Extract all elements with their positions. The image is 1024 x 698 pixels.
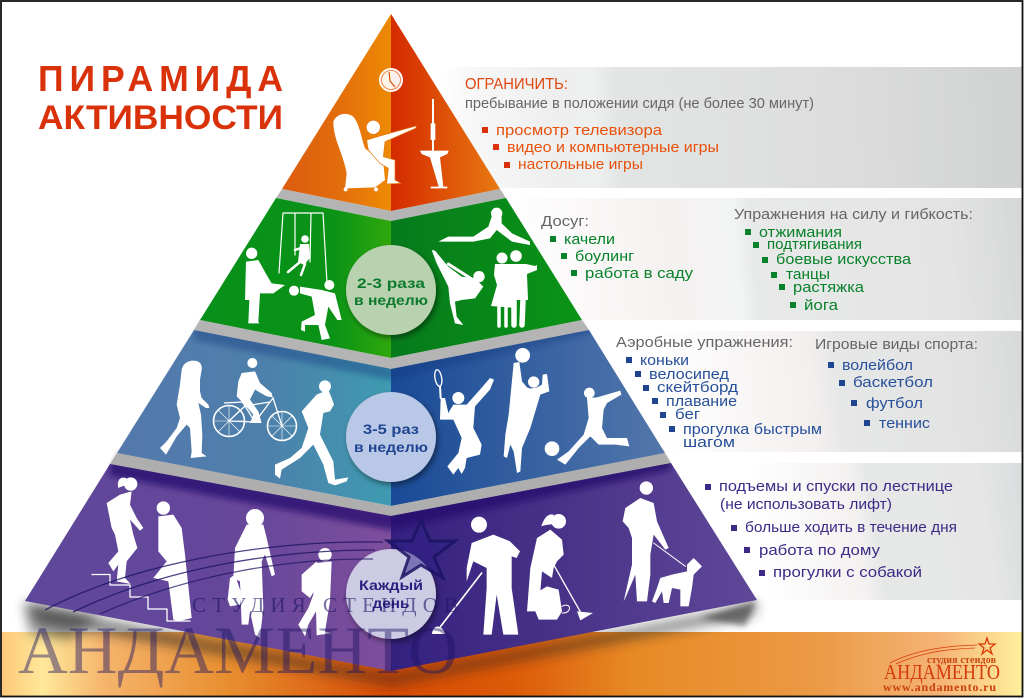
text block: every day activities: [705, 478, 957, 581]
text block: strength and flexibility: отжимания: [759, 224, 842, 241]
watermark: Andamento studio: [18, 520, 458, 688]
icon: soccer player with ball: [545, 388, 629, 465]
text block: limit: [465, 76, 814, 173]
icon: swing with child: [279, 213, 327, 283]
text block: aerobic: коньки: [640, 352, 689, 369]
icon: basketball player: [504, 348, 549, 473]
chevron divider 3: [110, 453, 671, 516]
text block: strength and flexibility: танцы: [786, 266, 830, 283]
badge: every day: Каждый: [359, 577, 423, 593]
text block: limit: настольные игры: [518, 156, 643, 173]
chevron divider 1: [276, 189, 506, 221]
text block: every day activities: работа по дому: [759, 542, 881, 559]
badge: 3-5 times a week: [346, 392, 436, 482]
badge: 2-3 times a week: в неделю: [354, 292, 428, 308]
icon: runner: [275, 380, 348, 485]
text block: strength and flexibility: [734, 206, 973, 314]
text block: limit: просмотр телевизора: [496, 122, 663, 139]
logo: Andamento footer: www.andamento.ru: [883, 680, 996, 694]
icon: tennis player: [434, 369, 494, 475]
badge: 2-3 times a week: [346, 245, 436, 335]
logo: Andamento footer: студия стендов: [927, 655, 997, 666]
text block: team sports: теннис: [879, 415, 931, 432]
text block: team sports: волейбол: [842, 357, 913, 374]
text block: limit: ОГРАНИЧИТЬ:: [465, 76, 568, 93]
icon: man walking dog: [623, 481, 685, 601]
icon: gardener: [245, 248, 285, 323]
text block: leisure: Досуг:: [541, 213, 589, 230]
text block: team sports: [815, 336, 978, 432]
watermark: Andamento studio: СТУДИЯ СТЕНДОВ: [192, 593, 458, 617]
tier 1: orange limit tier: [282, 14, 500, 211]
title: АКТИВНОСТИ: [38, 99, 283, 137]
text block: strength and flexibility: растяжка: [793, 279, 865, 296]
icon: child in armchair watching TV: [333, 99, 449, 191]
logo: Andamento footer: АНДАМЕНТО: [884, 660, 1000, 684]
text block: aerobic: велосипед: [649, 366, 729, 383]
title: [38, 58, 289, 137]
logo: Andamento footer: [883, 638, 1000, 694]
text block: leisure: боулинг: [575, 248, 635, 265]
icon: wall clock: [380, 68, 402, 92]
icon: dog: [652, 558, 702, 606]
tier 2: green tier: [200, 198, 582, 358]
badge: 2-3 times a week: 2-3 раза: [357, 275, 425, 291]
chevron divider 2: [194, 320, 589, 369]
icon: dancing couple: [491, 250, 537, 326]
text block: strength and flexibility: подтягивания: [767, 236, 862, 253]
panel: three to five times background: [560, 331, 1022, 452]
text block: strength and flexibility: йога: [804, 297, 839, 314]
text block: leisure: качели: [564, 231, 615, 248]
footer band: [2, 632, 1022, 696]
text block: team sports: футбол: [866, 395, 923, 412]
panel: twice weekly background: [480, 198, 1022, 320]
icon: man with mop: [432, 517, 520, 635]
tier 3: blue tier: [117, 326, 665, 506]
text block: aerobic: Аэробные упражнения:: [616, 334, 793, 351]
tier 4: purple tier: [25, 459, 757, 671]
icon: martial artist high kick: [432, 250, 485, 325]
icon: woman with handbag: [228, 509, 275, 638]
text block: strength and flexibility: боевые искусства: [776, 251, 912, 268]
text block: team sports: баскетбол: [853, 374, 933, 391]
text block: aerobic: прогулка быстрым: [683, 421, 822, 438]
badge: 3-5 times a week: 3-5 раз: [363, 421, 419, 437]
badge: 3-5 times a week: в неделю: [354, 439, 428, 455]
icon: bowler: [289, 280, 342, 340]
text block: aerobic: шагом: [683, 434, 735, 451]
text block: strength and flexibility: Упражнения на силу и гибкость:: [734, 206, 973, 223]
title: ПИРАМИДА: [38, 58, 289, 99]
text block: leisure: работа в саду: [585, 265, 694, 282]
icon: skater: [160, 361, 209, 458]
text block: limit: пребывание в положении сидя (не более 30 минут): [465, 95, 814, 112]
badge: every day: [346, 549, 436, 639]
text block: every day activities: (не использовать лифт): [720, 496, 892, 513]
badge: every day: день: [372, 595, 410, 611]
text block: every day activities: прогулки с собакой: [773, 564, 922, 581]
icon: boy with backpack: [298, 548, 332, 636]
text block: aerobic: [616, 334, 822, 451]
text block: aerobic: плавание: [666, 393, 737, 410]
text block: leisure: [541, 213, 694, 282]
panel: limit background: [445, 67, 1022, 188]
icon: cyclist: [214, 358, 296, 440]
panel: daily background: [640, 463, 1022, 600]
icon: yoga cobra pose: [438, 208, 530, 245]
text block: limit: видео и компьютерные игры: [507, 139, 719, 156]
icon: girl on stairs: [107, 477, 143, 584]
icon: woman with vacuum cleaner: [527, 514, 593, 620]
icon: man climbing stairs: [153, 501, 192, 621]
watermark: Andamento studio: АНДАМЕНТО: [18, 612, 458, 688]
icon: stairs: [92, 574, 190, 621]
text block: every day activities: больше ходить в течение дня: [745, 519, 957, 536]
text block: aerobic: скейтборд: [657, 379, 738, 396]
text block: aerobic: бег: [675, 406, 701, 423]
text block: every day activities: подъемы и спуски по лестнице: [719, 478, 953, 495]
text block: team sports: Игровые виды спорта:: [815, 336, 978, 353]
pyramid shadow: [24, 320, 760, 684]
